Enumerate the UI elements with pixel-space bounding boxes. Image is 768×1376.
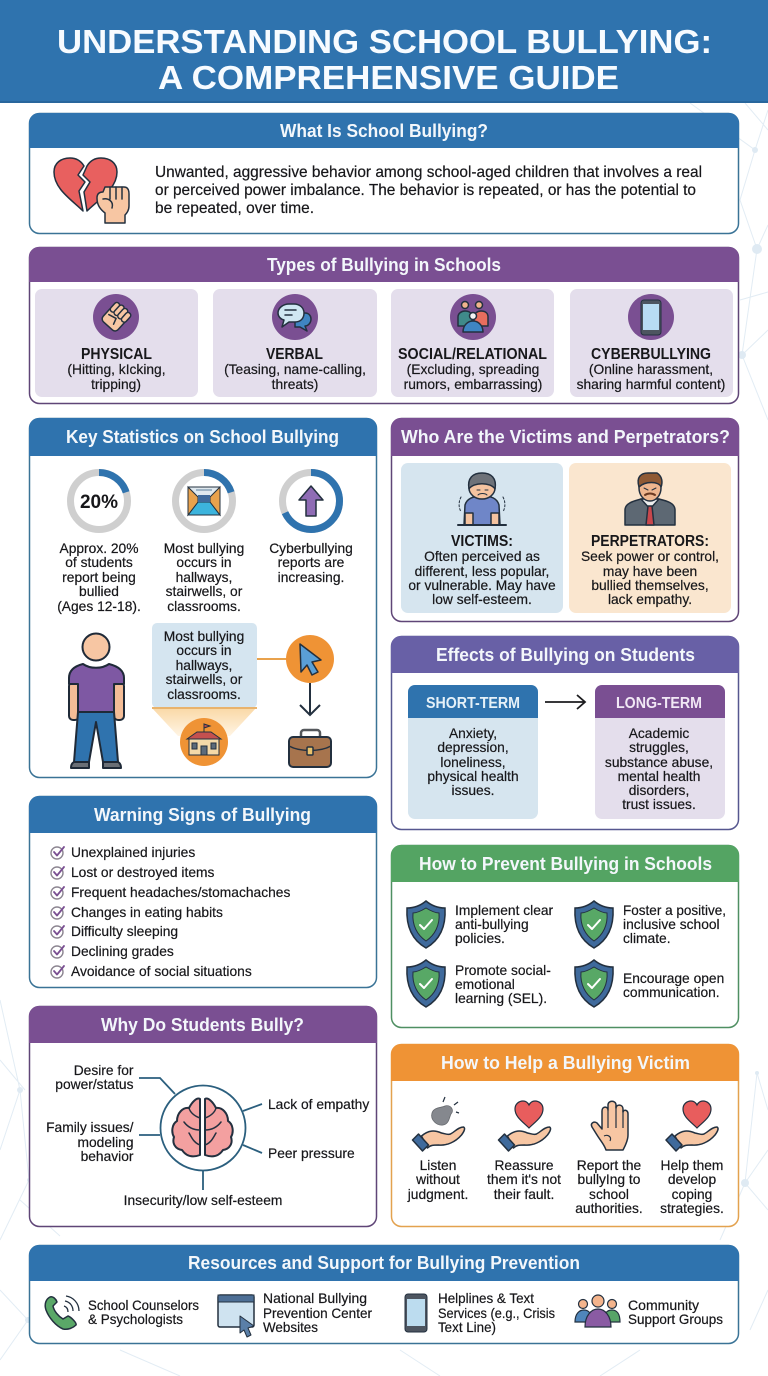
card: perpetrators: bullied themselves, [591, 578, 709, 593]
callout: most bullying occurs [152, 623, 257, 736]
heading: resources and support: Resources and Support for Bullying Prevention [188, 1252, 580, 1273]
text: location stat [164, 541, 244, 614]
card: cyberbullying: sharing harmful content) [577, 377, 725, 392]
item: social-emotional learning: emotional [455, 977, 515, 992]
resource: school counselors: & Psychologists [88, 1312, 183, 1327]
card: victims: Often perceived as [424, 549, 540, 564]
text: 20 percent stat: report being [62, 570, 136, 585]
text: definition [155, 164, 702, 217]
icon: speech bubbles [272, 294, 318, 340]
icon: group of people [450, 294, 496, 340]
heading: types of bullying [29, 247, 739, 282]
panel: warning signs [29, 796, 377, 988]
diagram: brain with causes: Desire for [74, 1063, 134, 1078]
text: location stat: classrooms. [167, 599, 241, 614]
card: verbal: VERBAL [266, 346, 323, 363]
card: perpetrators: Seek power or control, [581, 549, 719, 564]
checklist: warning signs [51, 845, 290, 979]
card: victims: different, less popular, [415, 564, 549, 579]
stat: hallway donut [176, 472, 232, 530]
item: coping strategies: strategies. [660, 1201, 724, 1216]
heading: what is school bullying: What Is School Bullying? [280, 120, 488, 141]
item: reassure: them it's not [487, 1172, 561, 1187]
item: report: bullyIng to [578, 1172, 641, 1187]
card: physical: (Hitting, kIcking, [67, 362, 166, 377]
card: physical [35, 289, 198, 397]
card: physical: PHYSICAL [81, 346, 152, 363]
callout: most bullying occurs: classrooms. [167, 687, 241, 702]
item: positive climate [575, 901, 726, 948]
text: location stat: Most bullying [164, 541, 244, 556]
text: 20 percent stat: of students [65, 555, 133, 570]
stat: cyberbullying donut [282, 472, 340, 530]
checklist: warning signs: Lost or destroyed items [71, 865, 215, 880]
resource: helplines [405, 1291, 555, 1335]
item: positive climate: Foster a positive, [623, 903, 726, 918]
icon: fist [93, 294, 139, 340]
resource: school counselors: School Counselors [88, 1298, 199, 1313]
item: social-emotional learning [407, 960, 551, 1007]
diagram: brain with causes: Insecurity/low self-esteem [124, 1193, 282, 1208]
heading: effects of bullying [391, 636, 739, 673]
box: short-term effects [408, 685, 538, 819]
item: coping strategies [660, 1101, 724, 1216]
diagram: brain with causes [46, 1063, 369, 1208]
item: reassure: Reassure [494, 1158, 554, 1173]
box: short-term effects: physical health [427, 769, 519, 784]
item: clear policies: policies. [455, 931, 505, 946]
box: long-term effects: disorders, [629, 783, 689, 798]
box: long-term effects: Academic [629, 726, 689, 741]
icon: broken heart and fist [54, 158, 129, 223]
card: social relational: rumors, embarrassing) [404, 377, 542, 392]
text: 20 percent stat: Approx. 20% [60, 541, 138, 556]
text: cyberbullying stat: increasing. [278, 570, 344, 585]
box: long-term effects: trust issues. [622, 797, 696, 812]
item: clear policies [407, 901, 554, 948]
resource: national prevention websites: Prevention Center [263, 1306, 372, 1321]
box: long-term effects [595, 685, 725, 819]
resource: helplines: Text Line) [438, 1320, 496, 1335]
box: short-term effects: depression, [437, 740, 509, 755]
heading: help a victim [391, 1044, 739, 1081]
resource: community groups: Support Groups [628, 1312, 723, 1327]
diagram: brain with causes: modeling [78, 1135, 134, 1150]
card: perpetrators [569, 463, 731, 613]
card: verbal: (Teasing, name-calling, [224, 362, 366, 377]
card: social relational [391, 289, 554, 397]
item: listen: judgment. [407, 1187, 468, 1202]
heading: prevent bullying [391, 845, 739, 882]
panel: help a victim [391, 1044, 739, 1226]
text: location stat: hallways, [176, 570, 232, 585]
card: victims: low self-esteem. [432, 592, 532, 607]
item: social-emotional learning: Promote social- [455, 963, 551, 978]
card: victims [401, 463, 563, 613]
box: short-term effects: SHORT-TERM [426, 695, 520, 712]
resource: helplines: Services (e.g., Crisis [438, 1306, 555, 1321]
diagram: brain with causes: Family issues/ [46, 1120, 134, 1135]
text: location stat: stairwells, or [166, 584, 243, 599]
item: open communication: communication. [623, 985, 720, 1000]
text: 20 percent stat: (Ages 12-18). [57, 599, 141, 614]
box: long-term effects: LONG-TERM [616, 695, 702, 712]
panel: why students bully [29, 1006, 377, 1226]
heading: warning signs: Warning Signs of Bullying [94, 804, 311, 825]
card: perpetrators: PERPETRATORS: [591, 533, 709, 550]
item: open communication [575, 960, 724, 1007]
title banner: A COMPREHENSIVE GUIDE [158, 59, 619, 96]
item: report: school [589, 1187, 629, 1202]
resource: school counselors [45, 1296, 199, 1329]
arrow: short to long term [545, 695, 585, 709]
item: report: Report the [577, 1158, 642, 1173]
item: coping strategies: develop [668, 1172, 716, 1187]
item: clear policies: anti-bullying [455, 917, 529, 932]
checklist: warning signs: Avoidance of social situations [71, 964, 252, 979]
card: verbal [213, 289, 377, 397]
diagram: brain with causes: Lack of empathy [268, 1097, 369, 1112]
icon: school building [180, 718, 228, 766]
heading: victims and perpetrators [391, 418, 739, 456]
panel: key statistics [29, 418, 377, 778]
heading: help a victim: How to Help a Bullying Victim [441, 1052, 690, 1073]
heading: why students bully [29, 1006, 377, 1043]
item: report [575, 1101, 643, 1216]
box: short-term effects: Anxiety, [449, 726, 497, 741]
resource: community groups [575, 1295, 723, 1327]
checklist: warning signs: Frequent headaches/stomachaches [71, 885, 290, 900]
heading: types of bullying: Types of Bullying in Schools [267, 254, 501, 275]
diagram: brain with causes: power/status [55, 1077, 134, 1092]
diagram: brain with causes: Peer pressure [268, 1146, 355, 1161]
box: short-term effects: issues. [452, 783, 494, 798]
resource: helplines: Helplines & Text [438, 1291, 534, 1306]
stat: 20 percent donut [70, 472, 128, 530]
checklist: warning signs: Difficulty sleeping [71, 924, 178, 939]
arrow: down to briefcase [300, 683, 320, 715]
title banner: UNDERSTANDING SCHOOL BULLYING: [57, 23, 712, 60]
icon: cursor circle [286, 635, 334, 683]
icon: standing student [69, 634, 124, 768]
text: cyberbullying stat: reports are [278, 555, 345, 570]
icon: smartphone [628, 294, 674, 340]
card: cyberbullying [570, 289, 733, 397]
item: reassure [487, 1101, 561, 1202]
panel: types of bullying [29, 247, 739, 404]
item: clear policies: Implement clear [455, 903, 554, 918]
item: report: authorities. [575, 1201, 643, 1216]
item: social-emotional learning: learning (SEL). [455, 991, 547, 1006]
heading: victims and perpetrators: Who Are the Victims and Perpetrators? [401, 426, 730, 447]
item: positive climate: inclusive school [623, 917, 720, 932]
icon: brain [172, 1099, 233, 1156]
card: perpetrators: lack empathy. [608, 592, 692, 607]
text: definition: Unwanted, aggressive behavior among school-aged children that involves a real [155, 164, 702, 181]
text: definition: or perceived power imbalance. The behavior is repeated, or has the potential to [155, 182, 696, 199]
item: reassure: their fault. [494, 1187, 554, 1202]
card: social relational: (Excluding, spreading [407, 362, 539, 377]
card: perpetrators: may have been [603, 564, 697, 579]
box: long-term effects: struggles, [629, 740, 689, 755]
item: listen: Listen [420, 1158, 456, 1173]
text: 20 percent stat [57, 541, 141, 614]
box: long-term effects: mental health [618, 769, 700, 784]
heading: warning signs [29, 796, 377, 833]
checklist: warning signs: Unexplained injuries [71, 845, 195, 860]
item: open communication: Encourage open [623, 971, 724, 986]
heading: what is school bullying [29, 113, 739, 148]
text: definition: be repeated, over time. [155, 200, 314, 217]
icon: angry man in suit [625, 473, 675, 525]
callout: most bullying occurs: stairwells, or [166, 672, 243, 687]
card: verbal: threats) [272, 377, 318, 392]
card: social relational: SOCIAL/RELATIONAL [398, 346, 547, 363]
card: physical: tripping) [91, 377, 141, 392]
callout: most bullying occurs: Most bullying [164, 629, 244, 644]
callout: most bullying occurs: occurs in [176, 643, 232, 658]
checklist: warning signs: Declining grades [71, 944, 174, 959]
icon: sad child [458, 473, 506, 525]
heading: resources and support [29, 1245, 739, 1281]
heading: prevent bullying: How to Prevent Bullying in Schools [419, 853, 712, 874]
checklist: warning signs: Changes in eating habits [71, 905, 223, 920]
connector line to cursor [257, 658, 287, 660]
heading: key statistics [29, 418, 377, 456]
text: cyberbullying stat [269, 541, 353, 585]
callout: most bullying occurs: hallways, [176, 658, 232, 673]
resource: national prevention websites: National Bullying [263, 1291, 367, 1306]
title banner [0, 0, 768, 103]
panel: what is school bullying [29, 113, 739, 234]
heading: effects of bullying: Effects of Bullying on Students [436, 644, 695, 665]
item: coping strategies: Help them [661, 1158, 723, 1173]
text: location stat: occurs in [176, 555, 232, 570]
stat: 20 percent donut: 20% [80, 492, 118, 513]
item: listen: without [415, 1172, 460, 1187]
panel: resources and support [29, 1245, 739, 1344]
heading: why students bully: Why Do Students Bully? [101, 1014, 304, 1035]
icon: briefcase [289, 730, 331, 767]
item: listen [407, 1097, 468, 1202]
diagram: brain with causes: behavior [81, 1149, 134, 1164]
card: cyberbullying: (Online harassment, [589, 362, 713, 377]
resource: community groups: Community [628, 1298, 699, 1313]
resource: national prevention websites [218, 1291, 372, 1337]
text: 20 percent stat: bullied [79, 584, 119, 599]
resource: national prevention websites: Websites [263, 1320, 318, 1335]
panel: effects of bullying [391, 636, 739, 830]
item: positive climate: climate. [623, 931, 671, 946]
card: cyberbullying: CYBERBULLYING [591, 346, 711, 363]
panel: prevent bullying [391, 845, 739, 1028]
box: long-term effects: substance abuse, [605, 755, 713, 770]
card: victims: VICTIMS: [451, 533, 513, 550]
card: victims: or vulnerable. May have [408, 578, 556, 593]
item: coping strategies: coping [672, 1187, 712, 1202]
panel: victims and perpetrators [391, 418, 739, 622]
text: cyberbullying stat: Cyberbullying [269, 541, 353, 556]
heading: key statistics: Key Statistics on School Bullying [66, 426, 339, 447]
box: short-term effects: loneliness, [440, 755, 506, 770]
